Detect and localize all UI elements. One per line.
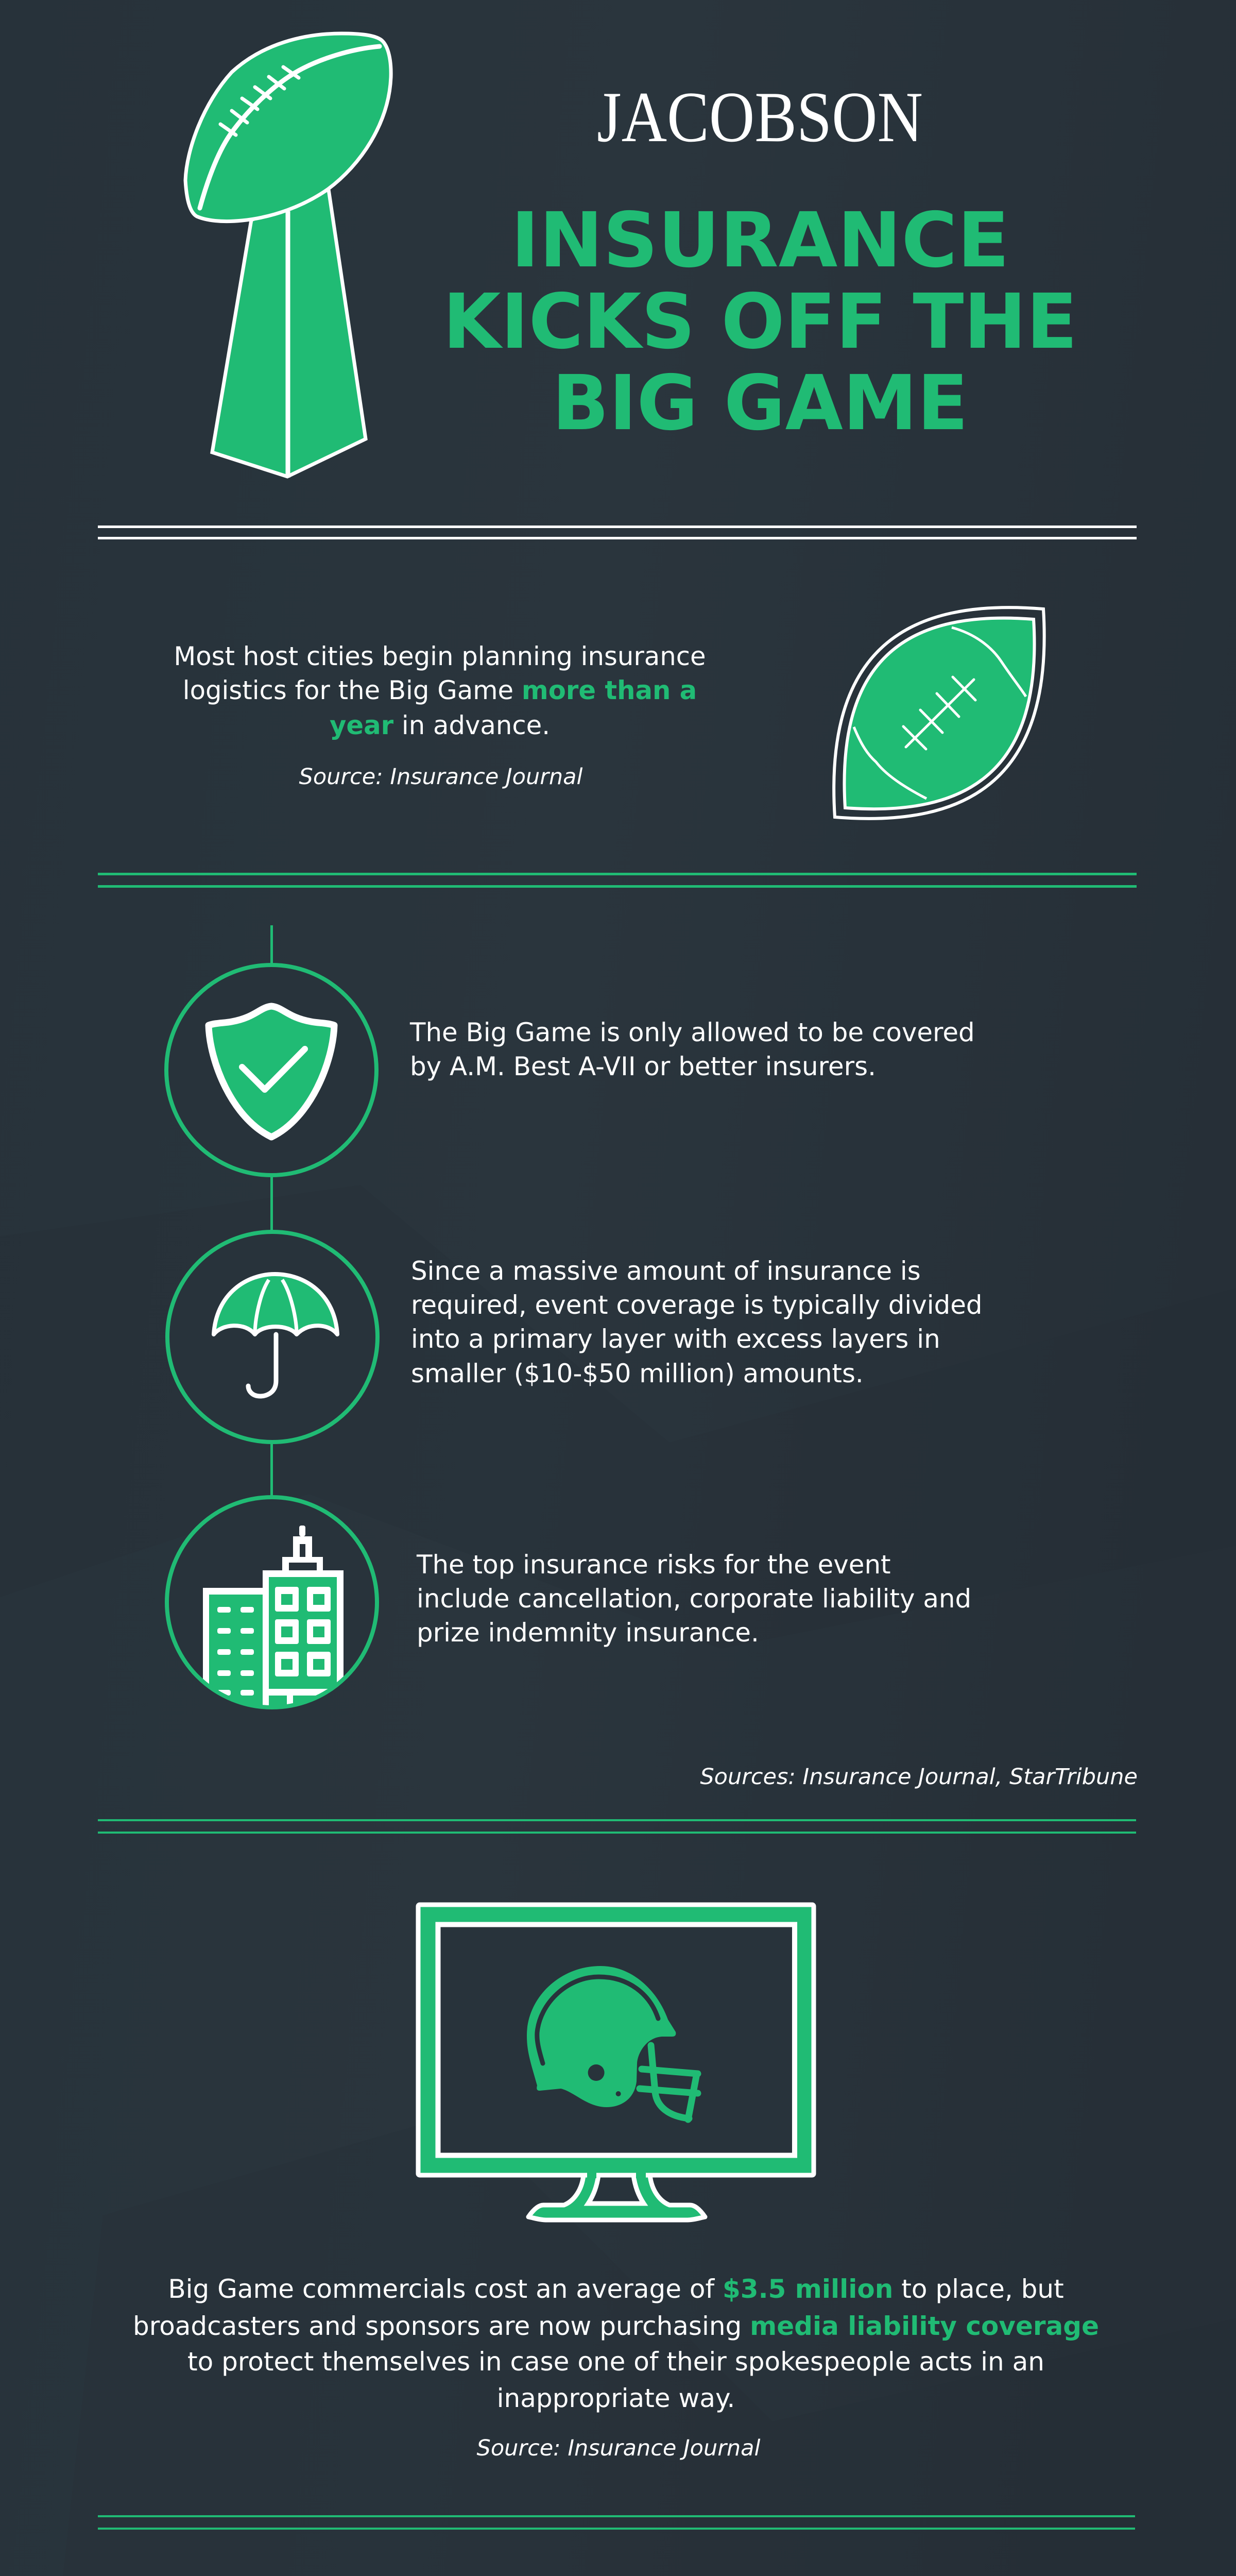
panel: planning xyxy=(174,607,1044,819)
text: planning: Source: Insurance Journal xyxy=(299,764,582,790)
text: top risks: include cancellation, corporate liability and xyxy=(417,1584,971,1614)
text: top risks: prize indemnity insurance. xyxy=(417,1618,759,1648)
panel: commercials xyxy=(133,1905,1099,2461)
text: planning xyxy=(174,641,706,790)
icon: buildings xyxy=(167,1497,377,1716)
text: A.M. Best: by A.M. Best A-VII or better insurers. xyxy=(410,1052,876,1081)
panel: coverage facts xyxy=(166,925,1138,1790)
text: planning: logistics for the Big Game more than a xyxy=(183,675,697,705)
icon: trophy xyxy=(185,33,391,478)
title: INSURANCE xyxy=(511,196,1009,284)
text: commercials: broadcasters and sponsors are now purchasing media liability coverage xyxy=(133,2311,1099,2341)
title: BIG GAME xyxy=(552,359,968,447)
text: commercials: inappropriate way. xyxy=(497,2383,735,2413)
text: planning: Most host cities begin planning insurance xyxy=(174,641,706,671)
header panel xyxy=(185,33,1077,478)
text: top risks: The top insurance risks for the event xyxy=(416,1550,891,1580)
text: primary layer xyxy=(411,1256,983,1388)
icon: shield xyxy=(166,965,376,1175)
text: primary layer: Since a massive amount of insurance is xyxy=(411,1256,921,1286)
text: A.M. Best xyxy=(409,1018,975,1081)
source: Sources: Insurance Journal, StarTribune xyxy=(700,1764,1138,1790)
text: A.M. Best: The Big Game is only allowed to be covered xyxy=(409,1018,975,1047)
icon: monitor with helmet xyxy=(418,1905,814,2220)
title xyxy=(443,196,1077,447)
text: commercials: to protect themselves in case one of their spokespeople acts in an xyxy=(187,2347,1044,2377)
icon: umbrella xyxy=(167,1232,377,1442)
logo: JACOBSON xyxy=(597,77,923,157)
text: primary layer: into a primary layer with excess layers in xyxy=(411,1324,940,1354)
text: primary layer: smaller ($10-$50 million) amounts. xyxy=(411,1359,864,1388)
title: KICKS OFF THE xyxy=(443,278,1077,366)
icon: football xyxy=(834,607,1044,819)
text: commercials xyxy=(133,2274,1099,2461)
text: commercials: Big Game commercials cost an average of $3.5 million to place, but xyxy=(168,2274,1064,2304)
text: top risks xyxy=(416,1550,971,1648)
text: planning: year in advance. xyxy=(330,710,550,740)
text: primary layer: required, event coverage is typically divided xyxy=(411,1290,983,1320)
text: commercials: Source: Insurance Journal xyxy=(477,2435,760,2461)
